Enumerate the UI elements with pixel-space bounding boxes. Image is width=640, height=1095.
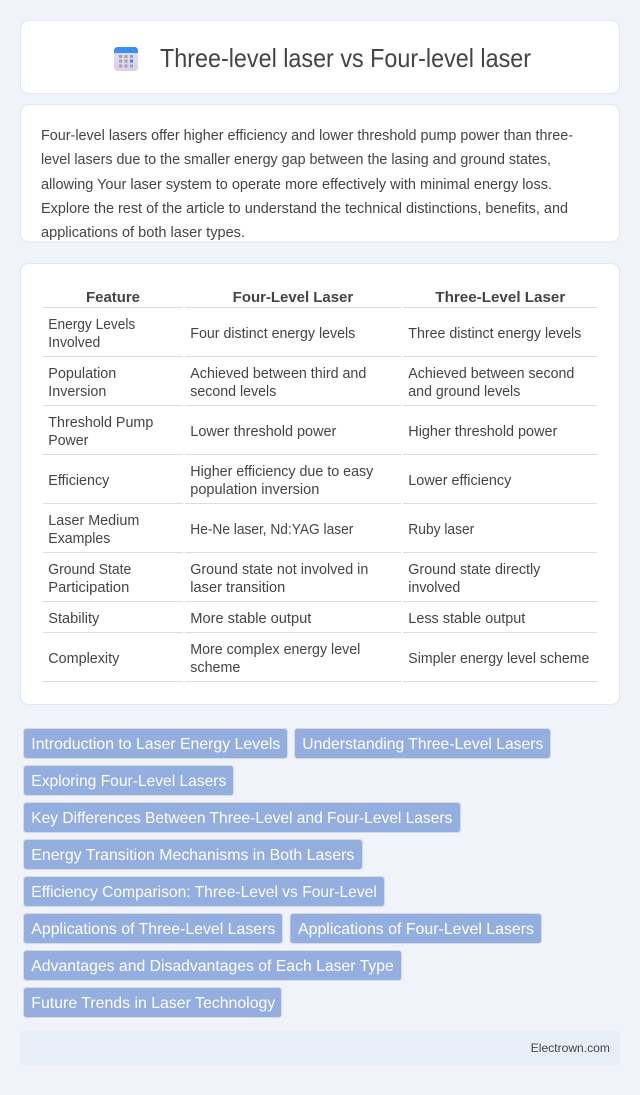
- tag: applications four-level: Applications of Four-Level Lasers: [298, 921, 534, 938]
- panel: comparison table: [20, 264, 620, 704]
- row: complexity: scheme: [190, 660, 240, 676]
- row: complexity: Simpler energy level scheme: [408, 651, 589, 667]
- row: population inversion: Achieved between third and: [190, 366, 366, 382]
- row: threshold pump power: Higher threshold power: [408, 424, 557, 440]
- row: efficiency: population inversion: [190, 482, 319, 498]
- panel: introduction: [20, 104, 620, 242]
- icon: calendar: [114, 47, 138, 71]
- row: population inversion: [43, 366, 597, 406]
- row: population inversion: Inversion: [48, 384, 106, 400]
- intro paragraph: [41, 128, 573, 241]
- title: Three-level laser vs Four-level laser: [160, 45, 531, 73]
- tag list: article sections: [24, 728, 550, 1018]
- row: threshold pump power: Lower threshold power: [190, 424, 337, 440]
- row: population inversion: Population: [48, 366, 116, 382]
- tag: energy transition: [24, 840, 362, 870]
- row: ground state participation: Ground State: [48, 562, 131, 578]
- row: threshold pump power: Threshold Pump: [48, 415, 153, 431]
- row: population inversion: and ground levels: [408, 384, 520, 400]
- footer: [20, 1031, 620, 1065]
- tag: energy transition: Energy Transition Mechanisms in Both Lasers: [31, 847, 354, 864]
- row: efficiency: Lower efficiency: [408, 473, 512, 489]
- row: population inversion: second levels: [190, 384, 276, 400]
- row: stability: Less stable output: [408, 611, 525, 627]
- row: ground state participation: Ground state directly: [408, 562, 541, 578]
- table header: Four-Level Laser: [233, 290, 354, 306]
- row: stability: [43, 611, 597, 633]
- tag: applications four-level: [290, 914, 542, 944]
- row: laser medium examples: He-Ne laser, Nd:YAG laser: [190, 522, 353, 538]
- tag: exploring four-level: Exploring Four-Level Lasers: [31, 773, 226, 790]
- row: energy levels: Energy Levels: [48, 317, 135, 333]
- row: laser medium examples: Examples: [48, 531, 110, 547]
- table header: [43, 290, 597, 308]
- row: laser medium examples: Laser Medium: [48, 513, 139, 529]
- row: energy levels: Three distinct energy levels: [408, 326, 581, 342]
- table header: Three-Level Laser: [435, 290, 566, 306]
- row: ground state participation: [43, 562, 597, 602]
- row: threshold pump power: Power: [48, 433, 88, 449]
- tag: efficiency comparison: Efficiency Comparison: Three-Level vs Four-Level: [31, 884, 377, 901]
- tag: key differences: [24, 802, 460, 832]
- intro paragraph: Four-level lasers offer higher efficiency and lower threshold pump power than three-: [41, 128, 573, 144]
- row: efficiency: Higher efficiency due to easy: [190, 464, 374, 480]
- panel: title card: [20, 20, 620, 94]
- table header: Feature: [86, 290, 140, 306]
- row: complexity: Complexity: [48, 651, 120, 667]
- tag: future trends: [24, 988, 282, 1018]
- intro paragraph: allowing Your laser system to operate more effectively with minimal energy loss.: [41, 177, 552, 193]
- tag: applications three-level: Applications of Three-Level Lasers: [31, 921, 275, 938]
- tag: advantages and disadvantages: Advantages and Disadvantages of Each Laser Type: [31, 958, 394, 975]
- row: threshold pump power: [43, 415, 597, 455]
- tag: applications three-level: [24, 914, 282, 944]
- row: energy levels: [43, 317, 597, 357]
- row: laser medium examples: Ruby laser: [408, 522, 474, 538]
- tag: future trends: Future Trends in Laser Technology: [31, 995, 275, 1012]
- footer: Electrown.com: [531, 1041, 610, 1055]
- row: stability: More stable output: [190, 611, 311, 627]
- row: ground state participation: Ground state not involved in: [190, 562, 368, 578]
- row: stability: Stability: [48, 611, 100, 627]
- row: ground state participation: involved: [408, 580, 460, 596]
- row: energy levels: Four distinct energy levels: [190, 326, 355, 342]
- tag: key differences: Key Differences Between Three-Level and Four-Level Lasers: [31, 810, 452, 827]
- row: energy levels: Involved: [48, 335, 100, 351]
- intro paragraph: Explore the rest of the article to understand the technical distinctions, benefits, and: [41, 201, 568, 217]
- intro paragraph: level lasers due to the smaller energy gap between the lasing and ground states,: [41, 152, 551, 168]
- row: complexity: [43, 642, 597, 682]
- row: efficiency: [43, 464, 597, 504]
- row: ground state participation: laser transition: [190, 580, 285, 596]
- tag: introduction: [24, 728, 288, 758]
- row: population inversion: Achieved between second: [408, 366, 574, 382]
- tag: understanding three-level: Understanding Three-Level Lasers: [302, 736, 543, 753]
- tag: introduction: Introduction to Laser Energy Levels: [31, 736, 280, 753]
- tag: understanding three-level: [294, 728, 550, 758]
- row: efficiency: Efficiency: [48, 473, 110, 489]
- tag: advantages and disadvantages: [24, 950, 402, 980]
- tag: exploring four-level: [24, 766, 234, 796]
- intro paragraph: applications of both laser types.: [41, 225, 245, 241]
- row: laser medium examples: [43, 513, 597, 553]
- row: ground state participation: Participation: [48, 580, 129, 596]
- tag: efficiency comparison: [24, 876, 384, 906]
- row: complexity: More complex energy level: [190, 642, 360, 658]
